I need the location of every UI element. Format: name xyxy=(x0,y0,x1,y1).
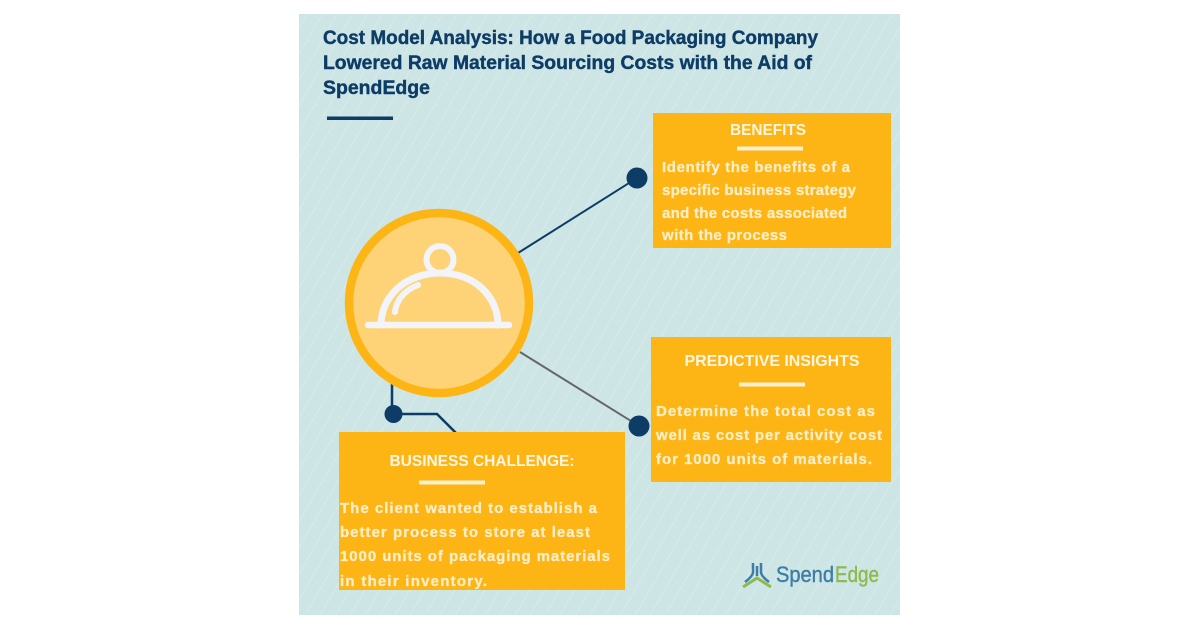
challenge text: better process to store at least xyxy=(340,524,590,541)
benefits text: Identify the benefits of a xyxy=(662,159,851,176)
benefits underline xyxy=(737,146,803,150)
panel: background xyxy=(299,14,900,615)
benefits text: specific business strategy xyxy=(662,182,857,199)
connector: to predictive insights xyxy=(520,352,650,436)
benefits text xyxy=(661,159,857,244)
predictive heading: PREDICTIVE INSIGHTS xyxy=(684,353,860,370)
predictive text: well as cost per activity cost xyxy=(655,427,882,444)
challenge text: 1000 units of packaging materials xyxy=(340,548,610,565)
connector: to benefits xyxy=(518,168,648,253)
title: Cost Model Analysis: How a Food Packaging Company xyxy=(323,28,818,49)
challenge underline xyxy=(419,480,485,484)
predictive text: for 1000 units of materials. xyxy=(656,451,872,468)
predictive underline xyxy=(739,382,805,386)
panel: benefits xyxy=(653,113,891,248)
benefits text: with the process xyxy=(661,227,787,244)
challenge text xyxy=(340,500,610,590)
title underline xyxy=(327,116,393,120)
predictive text xyxy=(655,403,882,468)
panel: predictive insights xyxy=(651,337,891,482)
benefits text: and the costs associated xyxy=(662,205,847,222)
logo wordmark: Spend xyxy=(776,562,834,587)
challenge text: The client wanted to establish a xyxy=(340,500,598,517)
benefits heading: BENEFITS xyxy=(730,122,806,139)
title: Lowered Raw Material Sourcing Costs with the Aid of xyxy=(323,53,813,74)
predictive text: Determine the total cost as xyxy=(656,403,875,420)
panel: business challenge xyxy=(339,432,625,590)
title: SpendEdge xyxy=(323,78,430,99)
logo wordmark: Edge xyxy=(835,562,879,587)
connector: to business challenge xyxy=(384,384,456,433)
challenge text: in their inventory. xyxy=(340,573,487,590)
title xyxy=(323,28,818,99)
logo wordmark xyxy=(776,562,879,587)
logo icon xyxy=(743,563,771,587)
logo: SpendEdge xyxy=(743,562,879,587)
challenge heading: BUSINESS CHALLENGE: xyxy=(390,453,574,470)
icon: food cloche in circle xyxy=(349,213,529,393)
